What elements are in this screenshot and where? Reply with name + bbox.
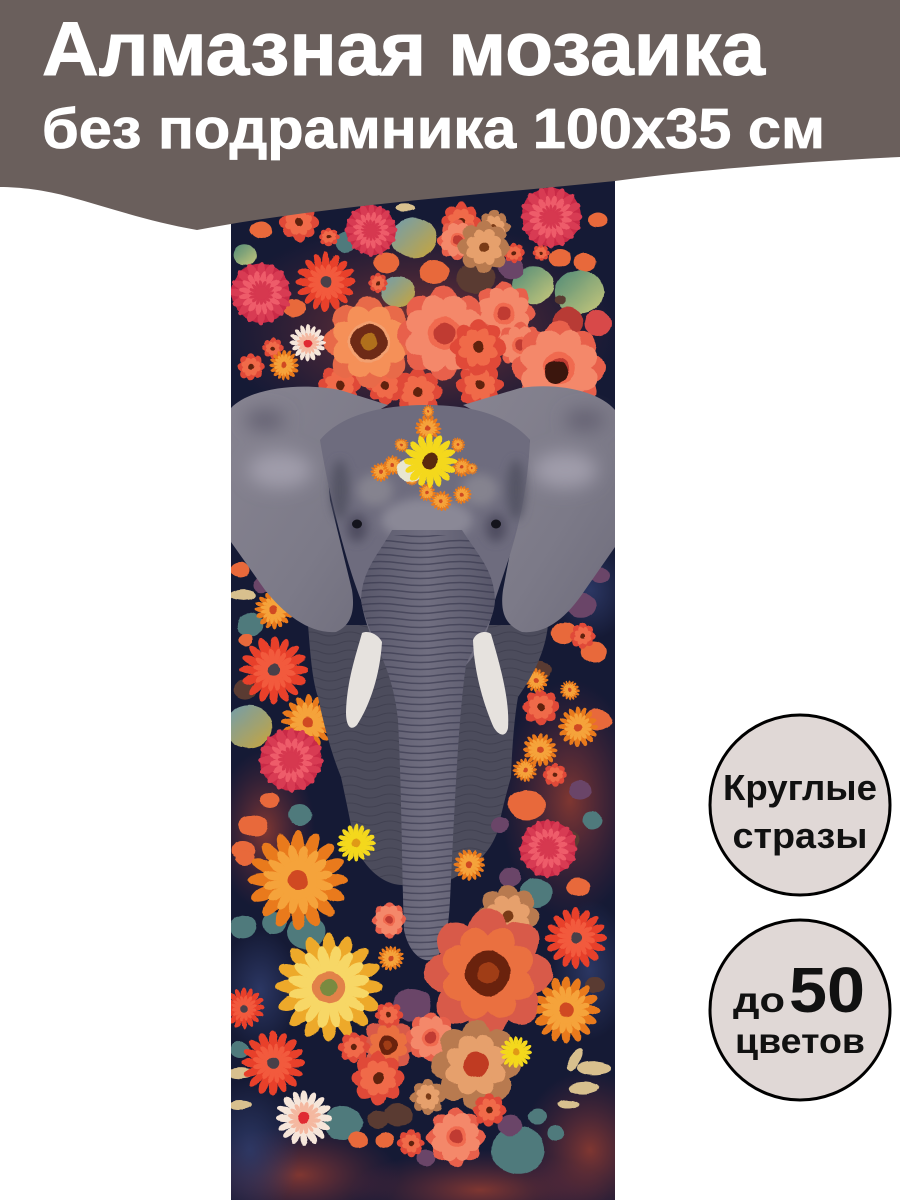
badge: round rhinestones: Круглые	[723, 767, 877, 808]
header banner	[0, 0, 900, 230]
elephant	[231, 386, 615, 965]
elephant head	[320, 405, 530, 665]
flowers: bottom cluster	[223, 816, 611, 1174]
badge: up to 50 colours: до	[733, 981, 785, 1020]
right tusk	[473, 632, 508, 735]
head shading	[331, 460, 525, 542]
elephant eyes	[352, 520, 501, 528]
badge: round rhinestones: стразы	[732, 815, 868, 856]
elephant legs	[300, 620, 555, 890]
elephant left ear	[231, 387, 388, 632]
badge: up to 50 colours: 50	[789, 954, 865, 1026]
flowers: left middle	[231, 562, 328, 857]
elephant trunk	[361, 530, 495, 960]
panel: artwork	[231, 181, 615, 1200]
flowers: right middle	[508, 567, 611, 828]
badge: round rhinestones	[710, 715, 890, 895]
subtitle: без подрамника 100х35 см	[42, 97, 825, 161]
badge: up to 50 colours: цветов	[735, 1022, 865, 1061]
flowers: top cluster	[230, 186, 611, 420]
title: Алмазная мозаика	[42, 7, 766, 92]
badge: up to 50 colours	[710, 920, 890, 1100]
elephant ear highlights	[245, 410, 605, 488]
forehead flower	[371, 406, 478, 512]
elephant right ear	[463, 386, 615, 632]
left tusk	[346, 632, 382, 728]
